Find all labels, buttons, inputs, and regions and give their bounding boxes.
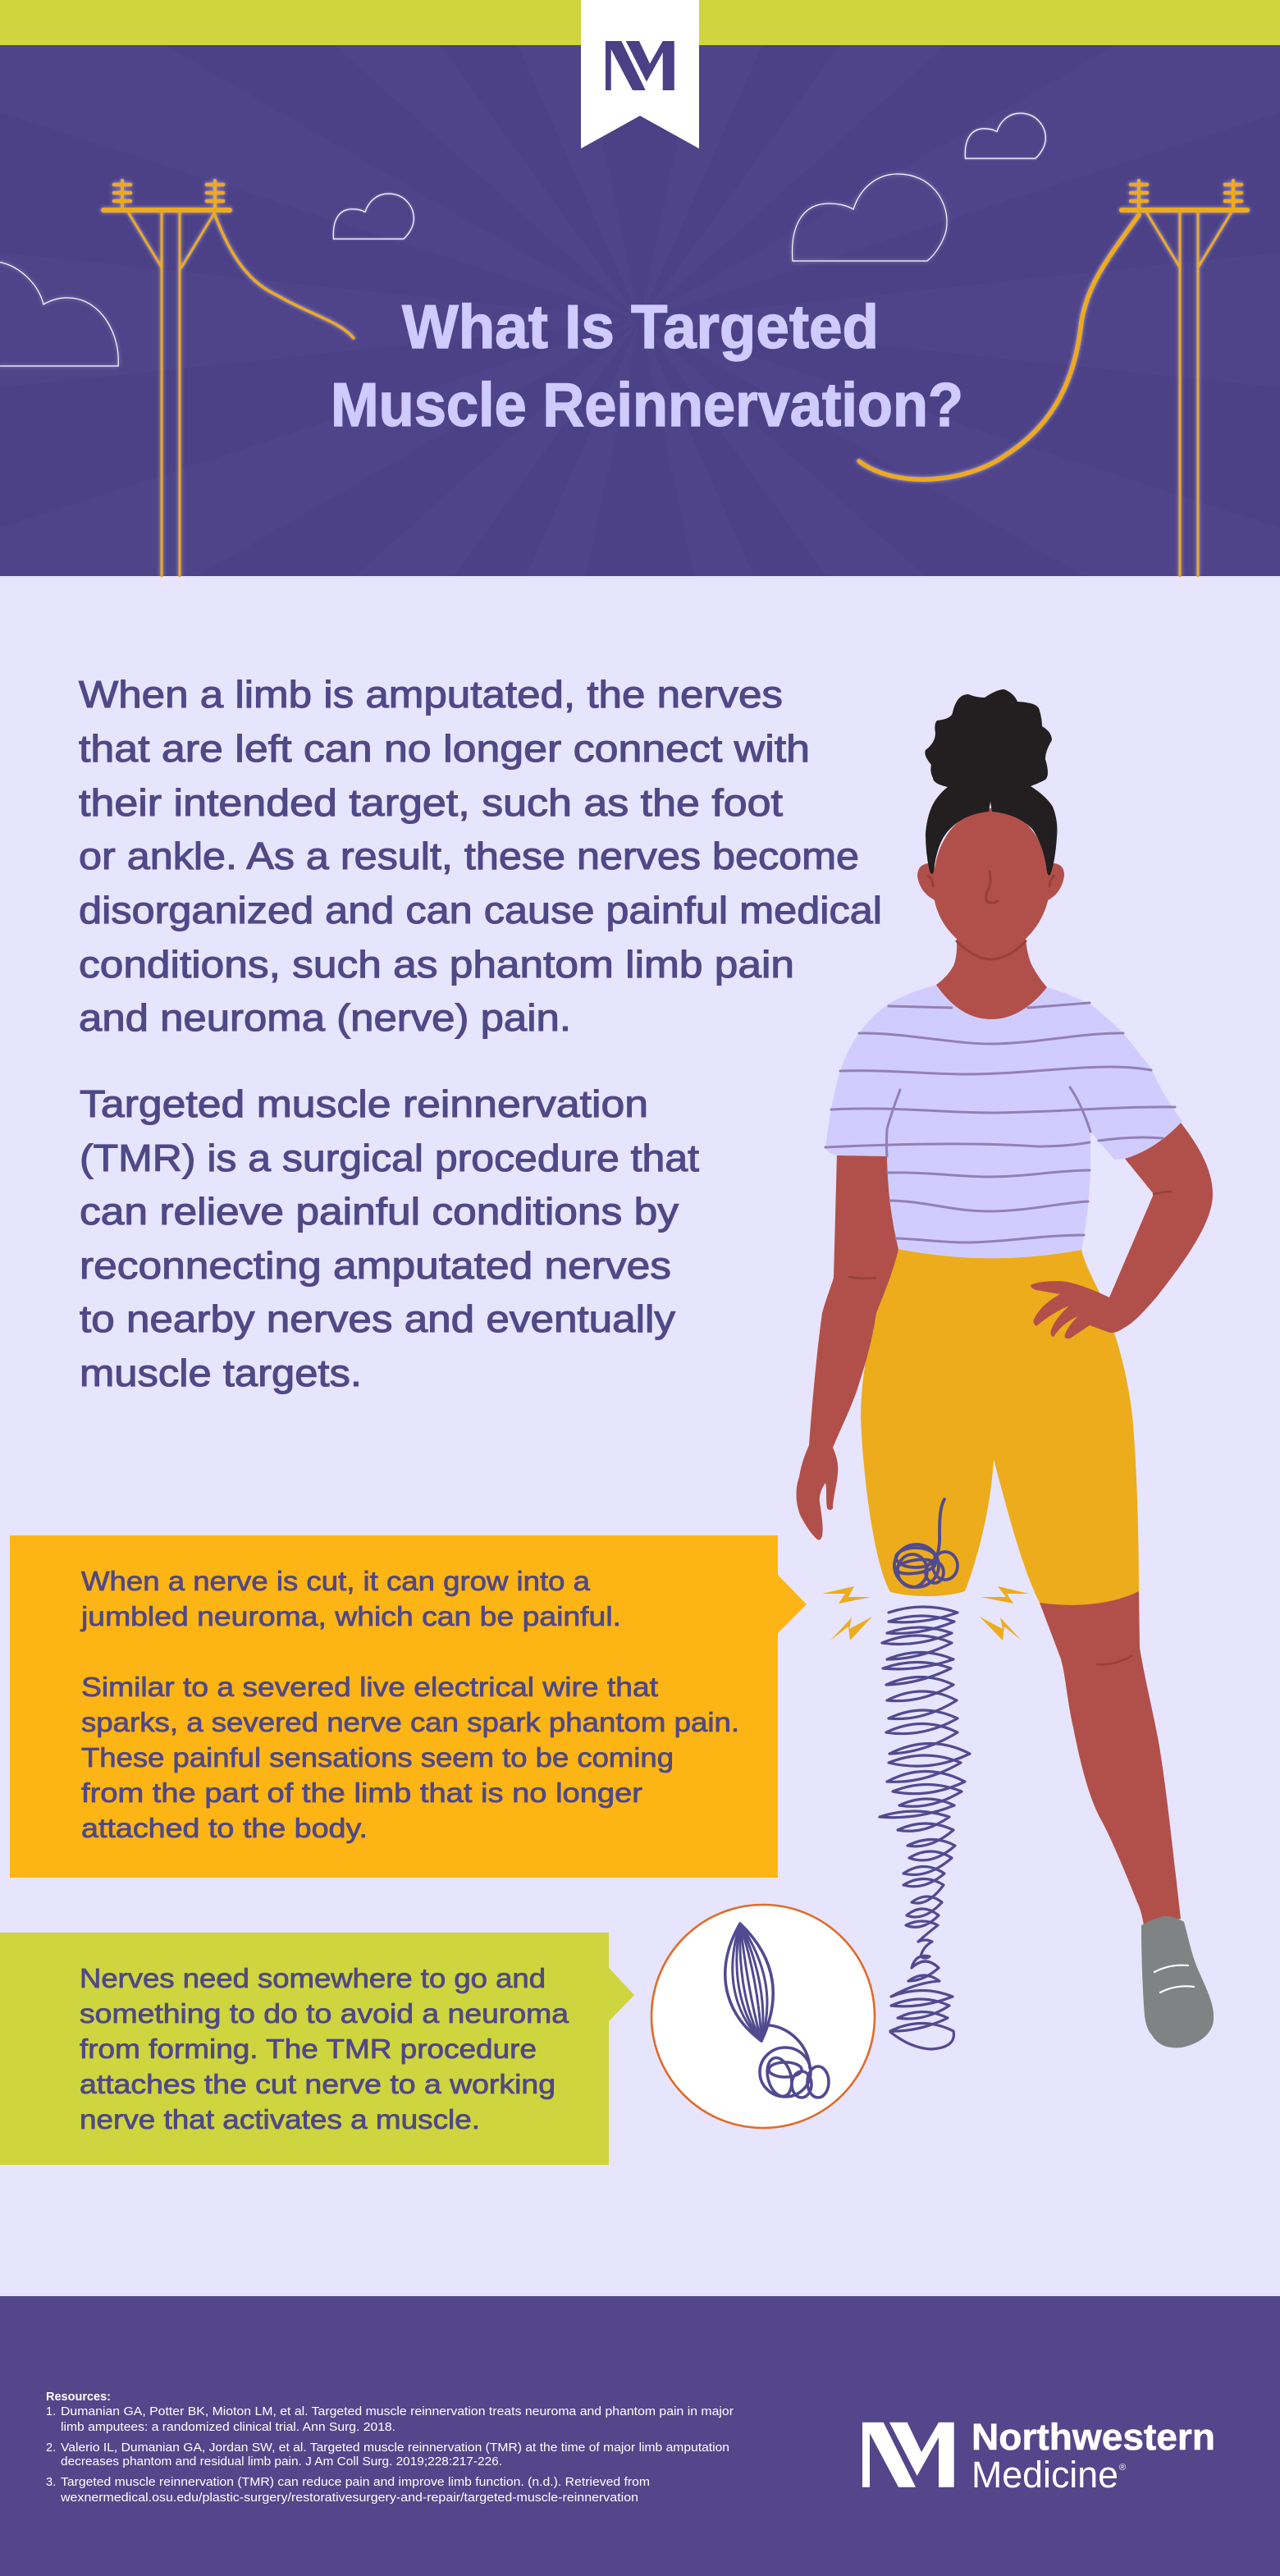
knee crease [1097,1656,1131,1664]
text block: what happens after amputation: disorganized and can cause painful medical [79,889,882,931]
illustration: woman with amputated leg [796,689,1214,2049]
neuroma tangle in thigh [894,1499,958,1587]
striped shirt [825,985,1182,1258]
callout: orange neuroma explanation: attached to the body. [81,1813,368,1843]
callout: orange neuroma explanation: sparks, a severed nerve can spark phantom pain. [81,1707,739,1737]
resources references: limb amputees: a randomized clinical trial. Ann Surg. 2018. [61,2421,395,2434]
face [935,808,1049,954]
right arm with hand on hip [1031,1123,1213,1338]
Northwestern Medicine logo: Northwestern [971,2416,1215,2458]
callout: green TMR explanation: Nerves need somewhere to go and [80,1963,546,1993]
facial details [928,872,1054,959]
pain sparks [822,1586,1029,1640]
icon: left utility pole with severed wire [103,181,354,576]
resources references: 1. [46,2405,56,2418]
title: Muscle Reinnervation? [331,370,963,439]
text block: what happens after amputation: When a limb is amputated, the nerves [79,673,783,716]
shorts [861,1249,1139,1605]
text block: what happens after amputation: their intended target, such as the foot [79,781,783,824]
resources references: wexnermedical.osu.edu/plastic-surgery/restorativesurgery-and-repair/targeted-muscle-reinnervation [60,2491,638,2505]
neck [936,927,1047,1019]
text block: what happens after amputation: or ankle. As a result, these nerves become [79,835,859,877]
resources references: Targeted muscle reinnervation (TMR) can reduce pain and improve limb function. (n.d.). Retrieved from [61,2476,650,2489]
text block: TMR definition: reconnecting amputated nerves [80,1244,671,1287]
icon: left cloud [0,262,118,366]
Northwestern Medicine logo: Medicine [971,2454,1118,2496]
hair [925,689,1057,875]
callout: orange neuroma explanation: from the part of the limb that is no longer [81,1778,642,1808]
icon: circle with muscle and nerve [651,1905,875,2128]
left arm and hand [796,1155,898,1540]
coiled phantom nerve [880,1607,970,2049]
resources references: Resources: [46,2391,111,2404]
text block: TMR definition [80,1082,699,1394]
resources references [46,2391,734,2505]
text block: TMR definition: to nearby nerves and eventually [80,1297,675,1340]
resources references: 2. [46,2441,56,2455]
callout: green TMR explanation: nerve that activates a muscle. [80,2104,480,2134]
callout: orange neuroma explanation: jumbled neuroma, which can be painful. [80,1601,621,1631]
callout: green TMR explanation: from forming. The TMR procedure [80,2034,537,2064]
ears [917,863,1064,901]
panel: footer [0,2296,1280,2576]
callout: orange neuroma explanation [10,1535,807,1878]
callout: orange neuroma explanation: When a nerve is cut, it can grow into a [81,1566,591,1596]
resources references: Dumanian GA, Potter BK, Mioton LM, et al. Targeted muscle reinnervation treats neuroma and phantom pain in major [61,2405,734,2418]
text block: what happens after amputation: conditions, such as phantom limb pain [79,943,794,986]
panel: header banner [0,0,1280,578]
icon: small cloud left [333,194,414,239]
text block: TMR definition: can relieve painful conditions by [80,1190,679,1233]
text block: TMR definition: Targeted muscle reinnervation [80,1082,648,1125]
title: What Is Targeted [402,292,879,361]
text block: TMR definition: (TMR) is a surgical procedure that [80,1137,699,1179]
text block: TMR definition: muscle targets. [80,1352,362,1394]
Northwestern Medicine logo [862,2416,1215,2496]
callout: green TMR explanation: attaches the cut nerve to a working [80,2069,555,2099]
resources references: 3. [46,2476,56,2489]
forearm crease [849,1277,875,1279]
callout: orange neuroma explanation: Similar to a severed live electrical wire that [81,1672,658,1702]
title [331,292,963,439]
icon: large cloud [793,174,947,261]
callout: green TMR explanation: something to do to avoid a neuroma [80,1998,569,2029]
shoe [1141,1916,1214,2048]
text block: what happens after amputation: that are left can no longer connect with [79,727,810,770]
icon: small cloud right [965,113,1045,158]
resources references: Valerio IL, Dumanian GA, Jordan SW, et al. Targeted muscle reinnervation (TMR) at the time of major limb amputation [61,2441,729,2455]
resources references: decreases phantom and residual limb pain. J Am Coll Surg. 2019;228:217-226. [61,2455,502,2468]
elbow crease [1154,1192,1171,1194]
text block: what happens after amputation [79,673,882,1039]
text block: what happens after amputation: and neuroma (nerve) pain. [79,996,571,1039]
Northwestern Medicine logo: ® [1119,2463,1126,2473]
ribbon with logo [581,0,699,149]
callout: green TMR explanation [0,1933,634,2165]
callout: orange neuroma explanation: These painful sensations seem to be coming [81,1742,674,1773]
icon: right utility pole with severed wire [859,181,1247,576]
right leg [1040,1591,1181,1925]
